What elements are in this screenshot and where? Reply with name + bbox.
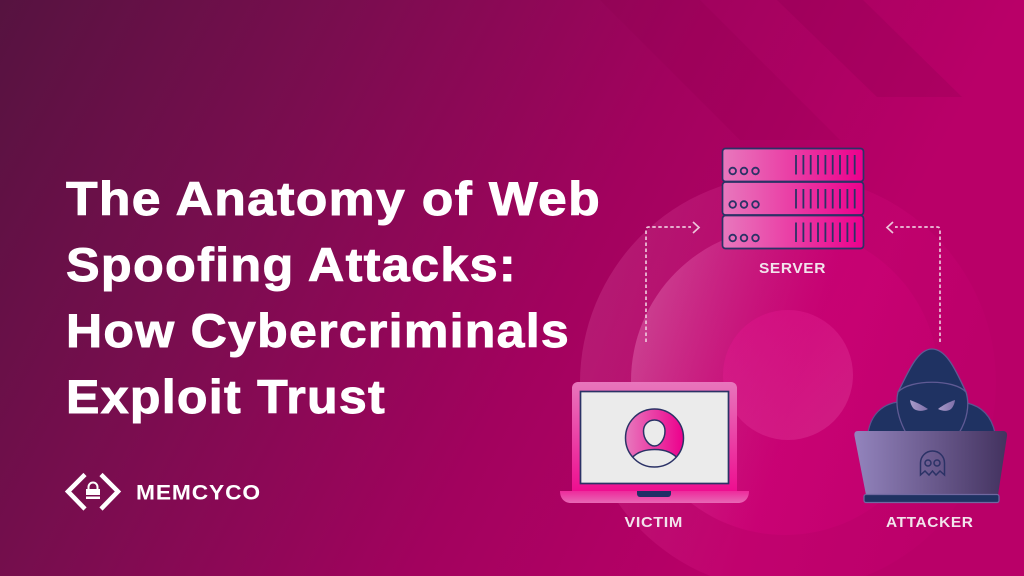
label: server: SERVER [759, 260, 826, 277]
title: How Cybercriminals [66, 305, 570, 358]
icon: victim laptop [560, 382, 749, 503]
title: The Anatomy of Web [66, 173, 601, 226]
label: attacker: ATTACKER [886, 514, 974, 531]
title [66, 173, 601, 424]
arrow: victim to server [646, 222, 699, 342]
server unit 2 [722, 182, 864, 215]
label: victim: VICTIM [624, 514, 683, 531]
logo: Memcyco [68, 474, 261, 509]
hacker hood [897, 349, 968, 433]
hacker eyes [910, 400, 928, 411]
title: Spoofing Attacks: [66, 239, 517, 292]
server unit 3 [722, 216, 864, 248]
server unit 1 [722, 148, 864, 182]
icon: server [722, 148, 864, 248]
icon: hooded attacker [854, 349, 1007, 502]
logo wordmark: MEMCYCO [136, 482, 261, 504]
icon: user avatar [626, 409, 684, 470]
hacker shoulders [868, 402, 910, 433]
title: Exploit Trust [66, 371, 386, 424]
icon: ghost [920, 451, 944, 475]
attacker laptop [854, 431, 1007, 495]
arrow: attacker to server [887, 222, 940, 342]
icon: logo brackets and lock [68, 474, 118, 509]
